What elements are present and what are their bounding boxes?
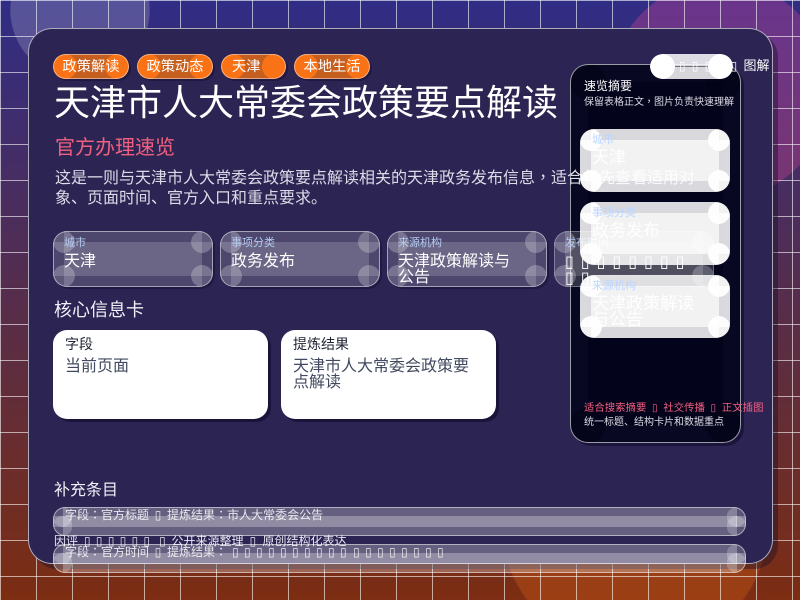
supplementary row 1: ▯ — [155, 508, 161, 522]
decorative circle: top right — [610, 0, 800, 200]
info card: field: 当前页面 — [65, 358, 129, 375]
rail footer tags: ▯ — [652, 402, 658, 414]
info card: field — [53, 330, 268, 419]
tag chip: policy reading: 政策解读 — [62, 59, 120, 75]
rail tile: source: 来源机构 — [592, 280, 636, 292]
supplementary row 2: ▯ — [155, 545, 161, 559]
decorative circle: top left — [10, 0, 150, 80]
source note: ▯ — [250, 534, 256, 548]
tag chip: policy reading — [53, 54, 129, 79]
intro text: 这是一则与天津市人大常委会政策要点解读相关的天津政务发布信息，适合优先查看适用对象、页面时间、官方入口和重点要求。 — [55, 164, 695, 207]
rail footer note: 统一标题、结构卡片和数据重点 — [584, 417, 724, 428]
tag chip: policy news: 政策动态 — [146, 59, 204, 75]
section heading: supplementary: 补充条目 — [54, 482, 118, 499]
info tile: publish time: 发布时间 — [565, 237, 609, 249]
info tile: category: 政务发布 — [231, 253, 295, 270]
tag chip: policy news — [137, 54, 213, 79]
subtitle: 官方办理速览 — [55, 137, 175, 159]
info tile: publish time: ▯▯▯▯▯▯▯▯ — [565, 252, 691, 271]
info tile: source: 来源机构 — [398, 237, 442, 249]
info card: field: 字段 — [65, 336, 93, 352]
info tile: source — [387, 231, 547, 287]
rail tile: category — [580, 202, 730, 265]
tag chip: local life — [294, 54, 370, 79]
supplementary row 1: 字段：官方标题 提炼结果：市人大常委会公告 — [65, 506, 323, 523]
rail heading: 速览摘要 — [584, 79, 632, 93]
supplementary row 2: 字段：官方时间 提炼结果： ▯▯▯▯▯▯▯▯▯▯▯▯▯▯▯▯▯▯ — [65, 543, 449, 560]
rail tile: city: 天津 — [592, 148, 626, 167]
info tile: category: 事项分类 — [231, 237, 275, 249]
title: 天津市人大常委会政策要点解读 — [54, 82, 558, 123]
info card: result — [281, 330, 496, 419]
tag chip: Tianjin: 天津 — [232, 59, 261, 75]
rail footer tags: ▯ — [711, 402, 716, 414]
tag chip: Tianjin — [221, 54, 286, 79]
info card: result: 提炼结果 — [293, 336, 349, 352]
tag chip: local life: 本地生活 — [303, 59, 361, 75]
info tile: city — [53, 231, 213, 287]
rail footer tags: 适合搜索摘要 社交传播 正文插图 — [584, 403, 763, 414]
rail tile: source — [580, 275, 730, 338]
decorative circle: bottom — [500, 385, 770, 600]
top right pill — [650, 54, 733, 79]
info tile: category — [220, 231, 380, 287]
source note: ▯ — [159, 534, 166, 548]
rail tile: city — [580, 129, 730, 192]
supplementary row 1 — [53, 507, 746, 536]
source note: 因评 ▯▯▯▯▯▯ 公开来源整理 原创结构化表达 — [54, 534, 346, 548]
info tile: publish time: ▯▯ — [565, 268, 597, 287]
rail subheading: 保留表格正文，图片负责快速理解 — [584, 93, 734, 108]
rail tile: source: 天津政策解读与公告 — [592, 294, 694, 329]
rail tile: category: 政务发布 — [592, 221, 660, 240]
rail tile: city: 城市 — [592, 134, 614, 146]
info tile: publish time — [554, 231, 714, 287]
rail tile: category: 事项分类 — [592, 207, 636, 219]
info tile: city: 天津 — [64, 253, 96, 270]
panel: quick summary rail — [570, 64, 741, 443]
top right label: ▯▯▯▯▯图解 — [679, 58, 770, 73]
section heading: core info: 核心信息卡 — [54, 300, 144, 320]
info tile: city: 城市 — [64, 237, 86, 249]
info card: result: 天津市人大常委会政策要点解读 — [293, 358, 469, 391]
supplementary row 2 — [53, 544, 746, 573]
info tile: source: 天津政策解读与公告 — [398, 253, 510, 286]
